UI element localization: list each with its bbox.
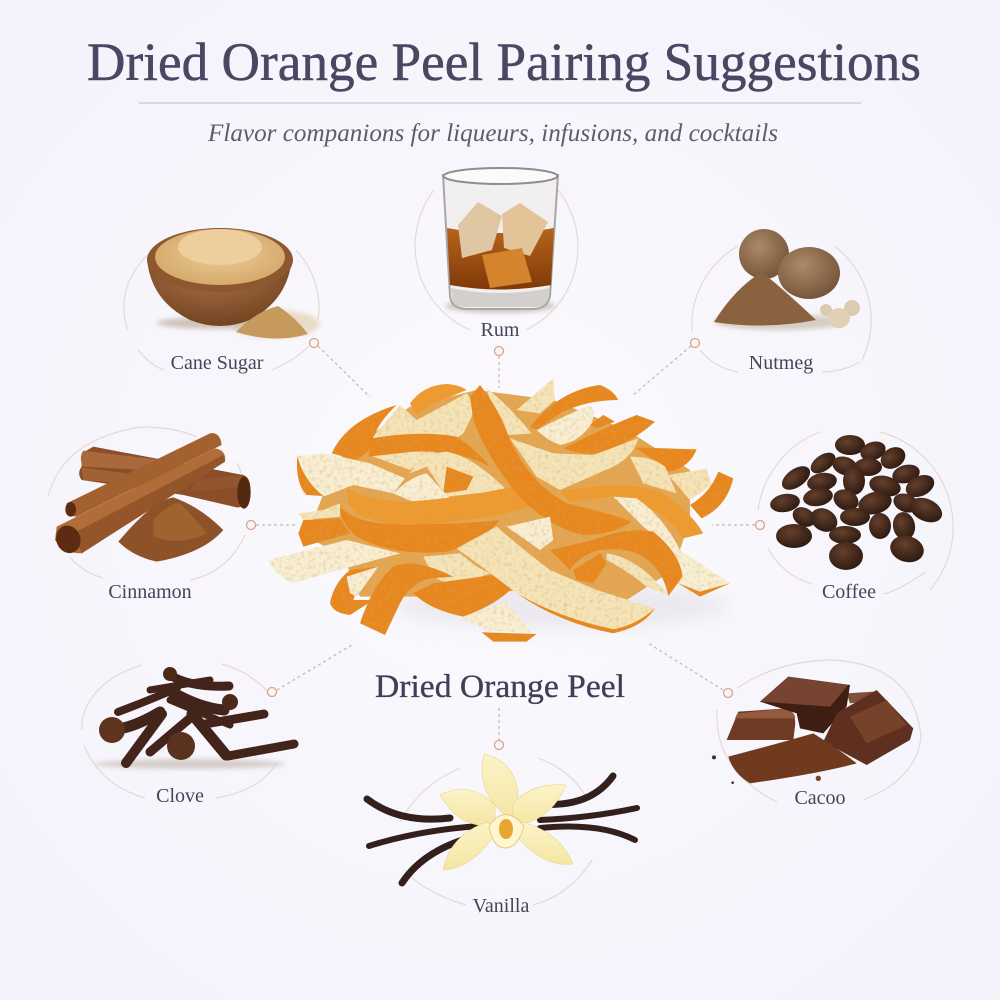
label: nutmeg: Nutmeg bbox=[749, 352, 813, 374]
label: rum: Rum bbox=[481, 319, 520, 341]
label: coffee: Coffee bbox=[822, 581, 876, 603]
label: cinnamon: Cinnamon bbox=[108, 581, 192, 603]
label: cane sugar: Cane Sugar bbox=[171, 352, 264, 374]
illustration: dried orange peel pile bbox=[268, 378, 733, 642]
icon: nutmeg bbox=[714, 229, 860, 330]
panel: cacao bbox=[712, 660, 921, 809]
icon: chocolate bbox=[712, 677, 913, 784]
center label: Dried Orange Peel bbox=[375, 669, 625, 705]
panel: clove bbox=[82, 664, 294, 807]
panel: nutmeg bbox=[692, 229, 871, 374]
icon: vanilla flower bbox=[367, 754, 637, 883]
title: Dried Orange Peel Pairing Suggestions bbox=[87, 32, 921, 92]
panel: coffee bbox=[758, 432, 953, 603]
icon: coffee beans bbox=[769, 435, 946, 570]
subtitle: Flavor companions for liqueurs, infusions, and cocktails bbox=[207, 120, 778, 147]
icon: sugar bowl bbox=[147, 228, 320, 339]
label: clove: Clove bbox=[156, 785, 204, 807]
icon: cinnamon bbox=[52, 433, 251, 562]
panel: rum bbox=[415, 168, 578, 341]
icon: cloves bbox=[95, 667, 294, 769]
panel: cane sugar bbox=[124, 228, 320, 374]
panel: cinnamon bbox=[48, 427, 251, 603]
connectors bbox=[246, 338, 764, 750]
panel: vanilla bbox=[367, 754, 637, 917]
label: vanilla: Vanilla bbox=[473, 895, 529, 917]
icon: rum glass bbox=[443, 168, 558, 313]
label: cacao: Cacoo bbox=[794, 787, 846, 809]
